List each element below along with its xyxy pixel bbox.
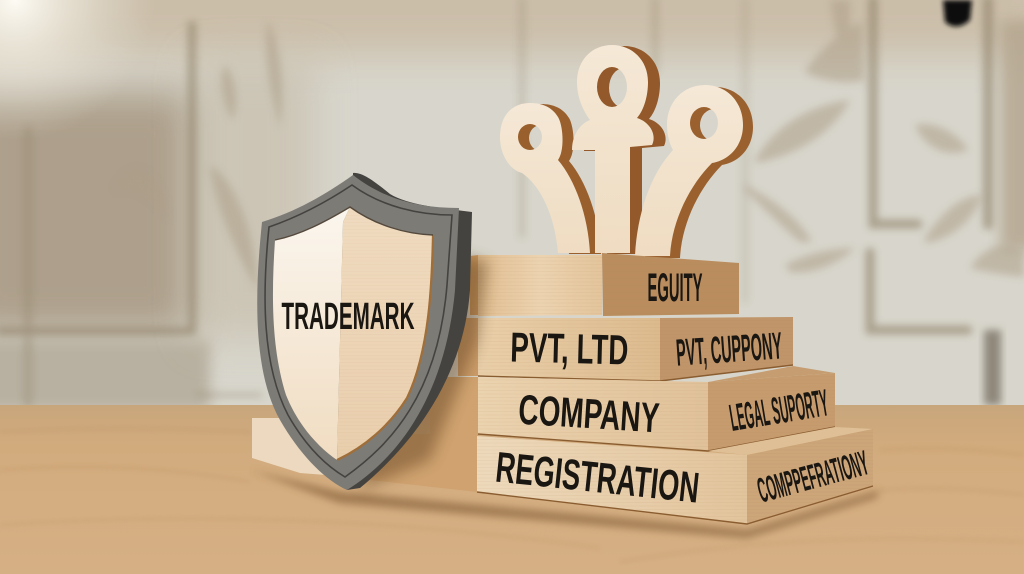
left peg [500, 103, 601, 254]
text: PVT, CUPPONY [675, 325, 783, 375]
wooden table [0, 405, 1024, 574]
block tier 4: EQUITY: EGUITY [648, 266, 703, 310]
shield cast shadow [360, 250, 488, 490]
shield wood face [273, 207, 350, 460]
label: TRADEMARK: TRADEMARK [282, 296, 415, 338]
block tier 2: COMPANY [430, 366, 835, 451]
label: REGISTRATION: REGISTRATION [494, 444, 701, 513]
wall background [0, 0, 1024, 410]
back bottom plank [252, 418, 400, 480]
label: PVT, LTD: PVT, LTD [510, 323, 629, 374]
block tier 3: PVT, LTD [458, 317, 793, 381]
label: COMPANY: COMPANY [517, 386, 661, 441]
right peg [635, 85, 753, 258]
middle peg [572, 45, 666, 254]
dark object at top of wall [943, 0, 972, 27]
block tier 4: EQUITY [470, 253, 739, 316]
icon: three wooden connector pegs [500, 45, 753, 258]
shield extruded side [347, 173, 472, 490]
shield grey frame [257, 175, 459, 490]
icon: trademark shield [257, 173, 488, 490]
block tier 1: REGISTRATION [360, 427, 873, 524]
